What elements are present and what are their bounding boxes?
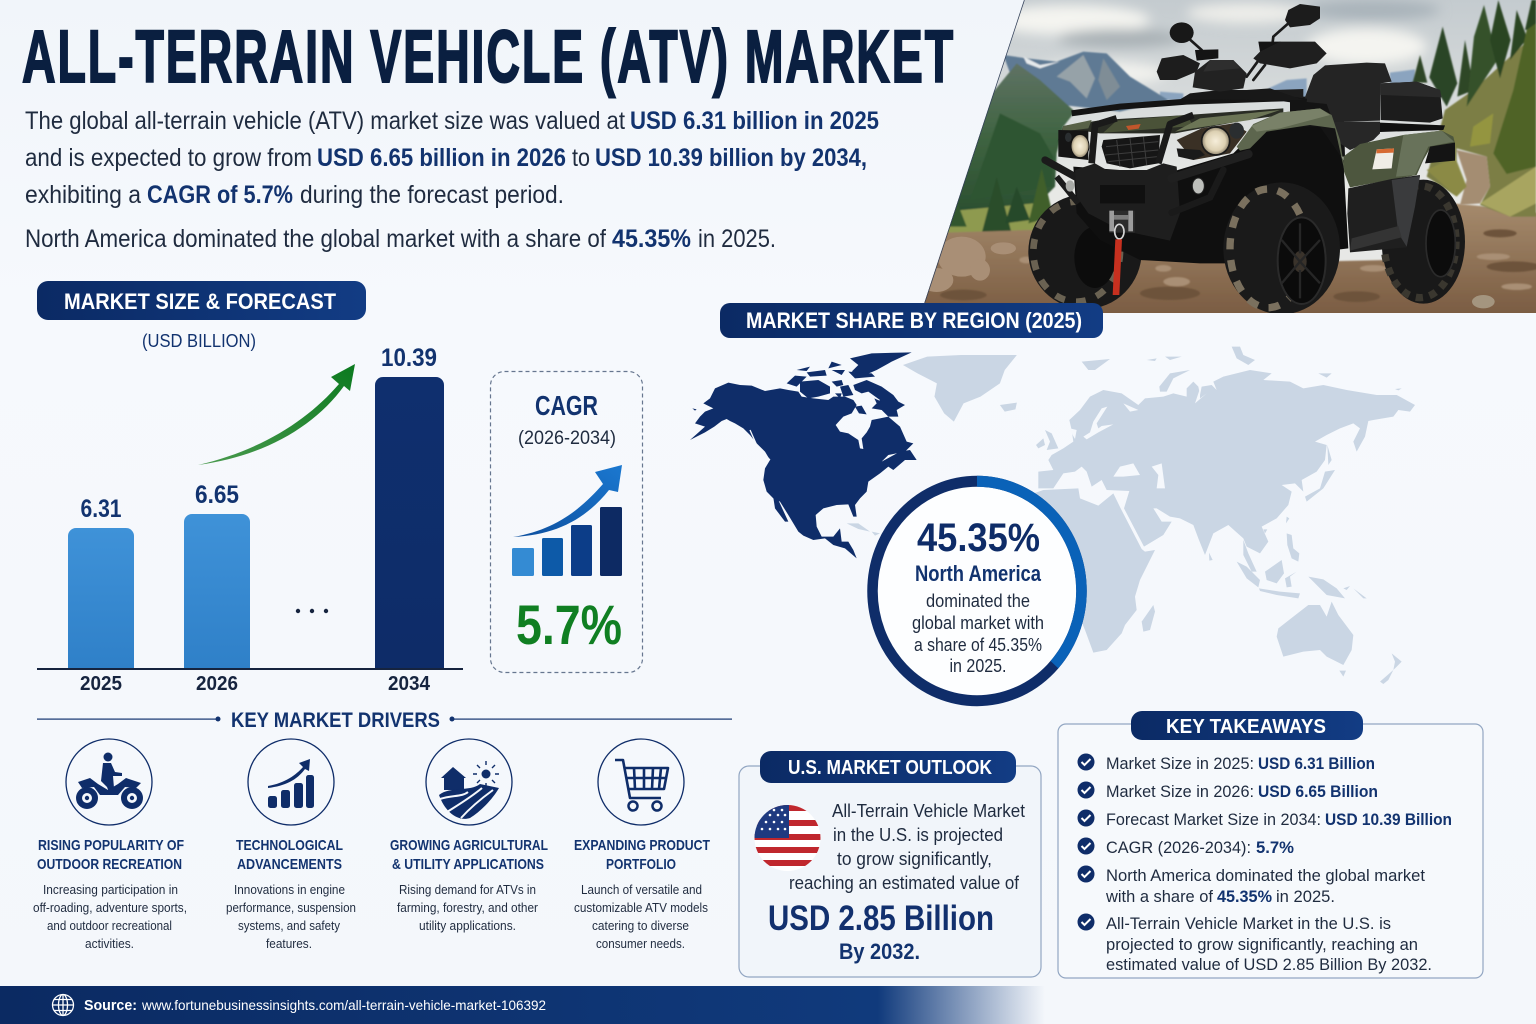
panel: driver technological advancements: performance, suspension [226,900,356,915]
panel: driver outdoor recreation: RISING POPULARITY OF [38,837,184,854]
heading: market share by region [720,303,1103,338]
footer source bar [0,986,1045,1024]
title: ALL-TERRAIN VEHICLE (ATV) MARKET [22,15,955,98]
world map [690,347,1415,684]
icon: shopping cart [598,739,684,825]
icon: globe [52,994,74,1016]
checklist: estimated value of USD 2.85 Billion By 2032. [1106,955,1432,974]
panel: key takeaways [1058,711,1483,978]
icon: rising bars [512,465,622,576]
intro text block: USD 10.39 billion by 2034, [595,144,867,172]
scenery left [996,0,1536,262]
icon: ATV rider [66,739,152,825]
Greenland and Iceland [903,355,1017,422]
icon: US flag [754,805,822,871]
Eurasia and Africa [997,347,1415,653]
heading pill: U.S. MARKET OUTLOOK [788,757,992,779]
panel: driver technological advancements: ADVANCEMENTS [237,856,342,873]
heading pill: KEY TAKEAWAYS [1166,716,1326,738]
panel: U.S. market outlook: USD 2.85 Billion [768,899,994,938]
intro text block: in 2025. [698,225,776,253]
rear fender [1343,131,1455,187]
guards [1092,118,1117,163]
bar 2026 [184,481,250,695]
body [1073,127,1348,263]
ellipsis [296,609,328,613]
checklist: projected to grow significantly, reaching an [1106,935,1418,954]
heading: market share by region: MARKET SHARE BY REGION (2025) [746,308,1082,333]
footer source bar: Source: [84,997,137,1014]
intro text block: 45.35% [612,225,691,253]
bar 2025: 2025 [80,673,122,695]
checklist: 5.7% [1256,838,1294,857]
panel: CAGR: 5.7% [516,593,622,656]
callout: North America share ring: North America [915,561,1042,586]
checklist [1078,754,1452,974]
intro text block: to [572,144,590,172]
callout: North America share ring: in 2025. [950,656,1006,676]
winch and tow strap [1109,211,1135,233]
rack [1072,98,1307,113]
heading: market size and forecast [37,281,366,320]
panel: driver agricultural and utility: Rising demand for ATVs in [399,882,536,897]
panel: U.S. market outlook: By 2032. [839,939,920,964]
panel: driver technological advancements: features. [266,936,312,951]
panel: driver outdoor recreation [33,739,187,951]
bar 2034: 2034 [388,673,431,695]
panel: U.S. market outlook: reaching an estimated value of [789,873,1020,893]
footer source bar: www.fortunebusinessinsights.com/all-terrain-vehicle-market-106392 [141,997,546,1013]
panel: driver technological advancements [226,739,356,951]
bar 2026: 6.65 [195,481,239,509]
heading pill [760,751,1016,783]
panel: driver outdoor recreation: and outdoor recreational [47,918,172,933]
callout: North America share ring: a share of 45.35% [914,635,1042,655]
panel: driver product portfolio: PORTFOLIO [606,856,676,873]
panel: driver agricultural and utility: farming, forestry, and other [397,900,539,915]
checklist: Market Size in 2025: [1106,754,1254,773]
panel: CAGR [490,372,642,672]
panel: driver outdoor recreation: OUTDOOR RECREATION [37,856,182,873]
inland seas [1070,388,1207,488]
heading: key market drivers [37,709,732,732]
panel: driver product portfolio [574,739,710,951]
intro text block: exhibiting a [25,181,141,209]
intro text block: CAGR of 5.7% [147,181,293,209]
intro text block: USD 6.31 billion in 2025 [630,107,879,135]
panel: driver agricultural and utility: & UTILITY APPLICATIONS [392,856,544,873]
callout: North America share ring [872,481,1082,701]
right front wheel [1223,182,1340,314]
checklist: with a share of [1105,887,1213,906]
bar 2026: 2026 [196,673,238,695]
panel: driver technological advancements: TECHNOLOGICAL [236,837,343,854]
heading: key market drivers: KEY MARKET DRIVERS [231,709,440,732]
bar 2025 [68,495,134,695]
panel: driver product portfolio: customizable ATV models [574,900,708,915]
panel: driver technological advancements: systems, and safety [238,918,340,933]
hood [1057,108,1283,143]
rear wheel [1273,63,1465,304]
callout: North America share ring: global market with [912,613,1044,633]
grille [1102,135,1160,168]
intro text block: and is expected to grow from [25,144,312,172]
rear box [1381,82,1443,123]
unit label: (USD BILLION) [142,331,256,351]
panel: driver product portfolio: consumer needs. [596,936,685,951]
checklist: USD 6.31 Billion [1258,754,1375,773]
checklist: USD 10.39 Billion [1325,810,1452,829]
panel: U.S. market outlook: to grow significantly, [837,849,992,869]
heading: market size and forecast: MARKET SIZE & FORECAST [64,289,337,314]
heading pill [1131,711,1363,740]
front fender [1237,108,1345,173]
bar 2025: 6.31 [80,495,122,523]
intro text block: North America dominated the global market with a share of [25,225,606,253]
panel: driver product portfolio: EXPANDING PRODUCT [574,837,710,854]
intro text block: The global all-terrain vehicle (ATV) market size was valued at [25,107,625,135]
growth arrow [198,364,355,465]
panel: driver technological advancements: Innovations in engine [234,882,345,897]
bar 2034 [375,344,444,695]
checklist: USD 6.65 Billion [1258,782,1378,801]
panel: driver agricultural and utility: utility applications. [419,918,516,933]
checklist: North America dominated the global market [1106,866,1425,885]
handlebars [1187,23,1288,80]
lamps [1071,134,1089,158]
panel: driver outdoor recreation: off-roading, adventure sports, [33,900,187,915]
left front wheel [1028,194,1142,309]
icon: growth chart [248,739,334,825]
panel: U.S. market outlook: All-Terrain Vehicle Market [832,801,1025,821]
panel: driver product portfolio: Launch of versatile and [581,882,702,897]
callout: North America share ring: 45.35% [917,516,1040,560]
bar chart [37,344,463,695]
panel: driver product portfolio: catering to diverse [592,918,689,933]
checklist: Market Size in 2026: [1106,782,1254,801]
hero photo: ATV on mountain trail [913,0,1536,315]
panel: U.S. market outlook: in the U.S. is projected [833,825,1003,845]
intro text block: during the forecast period. [300,181,564,209]
panel: driver outdoor recreation: Increasing participation in [43,882,178,897]
seat [1290,97,1345,157]
panel: CAGR: CAGR [535,390,598,421]
North America highlighted [690,352,917,558]
checklist: 45.35% [1217,887,1272,906]
panel: U.S. market outlook [739,751,1041,977]
panel: driver agricultural and utility [390,739,548,933]
callout: North America share ring: dominated the [926,591,1030,611]
bar 2034: 10.39 [381,344,437,372]
mudguard [1347,175,1420,252]
panel: driver outdoor recreation: activities. [85,936,134,951]
icon: farm fields [426,739,512,825]
South-East Asia, Oceania, Madagascar [1142,529,1402,684]
checklist: in 2025. [1276,887,1335,906]
panel: CAGR: (2026-2034) [518,428,616,449]
intro text block: USD 6.65 billion in 2026 [317,144,566,172]
intro text block [25,107,879,253]
panel: driver agricultural and utility: GROWING AGRICULTURAL [390,837,548,854]
checklist: CAGR (2026-2034): [1106,838,1251,857]
checklist: Forecast Market Size in 2034: [1106,810,1321,829]
checklist: All-Terrain Vehicle Market in the U.S. is [1106,914,1391,933]
scenery right [1413,0,1536,217]
